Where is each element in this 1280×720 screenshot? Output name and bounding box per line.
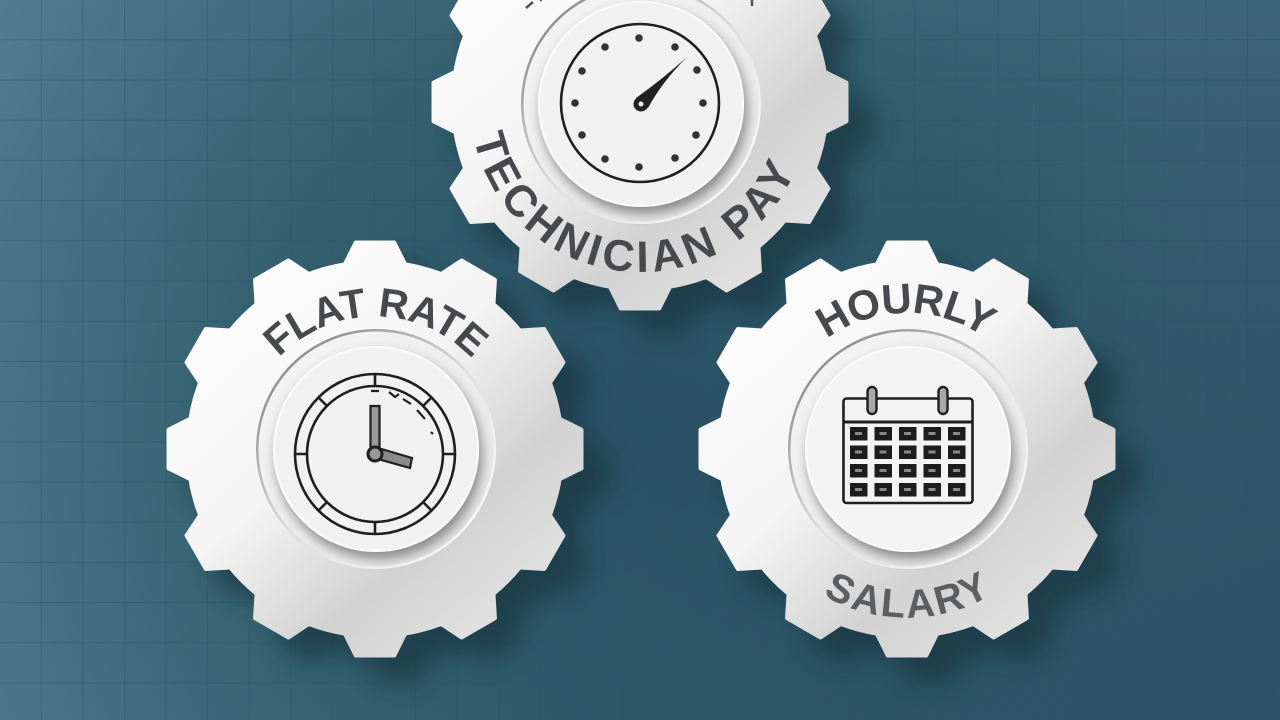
label: hourly: HOURLY bbox=[814, 284, 998, 337]
label: flat rate: FLAT RATE bbox=[262, 288, 490, 358]
gear body bbox=[433, 0, 847, 309]
gear: hourly salary bbox=[698, 240, 1116, 658]
recessed ring bbox=[521, 0, 761, 224]
raised disc bbox=[274, 347, 478, 551]
gear body bbox=[168, 242, 582, 656]
raised disc bbox=[806, 347, 1010, 551]
icon: clock bbox=[295, 374, 455, 534]
raised disc bbox=[539, 2, 743, 206]
icon: gauge bbox=[561, 24, 719, 182]
recessed ring bbox=[256, 329, 496, 569]
gear: flat rate bbox=[166, 240, 584, 658]
gear shadows bbox=[190, 0, 1140, 682]
gear body bbox=[700, 242, 1114, 656]
clock hands bbox=[370, 406, 380, 451]
label: technician pay: TECHNICIAN PAY bbox=[476, 129, 790, 272]
calendar cells bbox=[850, 427, 966, 496]
gear: technician pay bbox=[432, 0, 848, 310]
label: salary: SALARY bbox=[826, 571, 982, 618]
cropped top marks bbox=[526, 0, 752, 8]
icon: calendar bbox=[844, 387, 972, 503]
recessed ring bbox=[788, 329, 1028, 569]
